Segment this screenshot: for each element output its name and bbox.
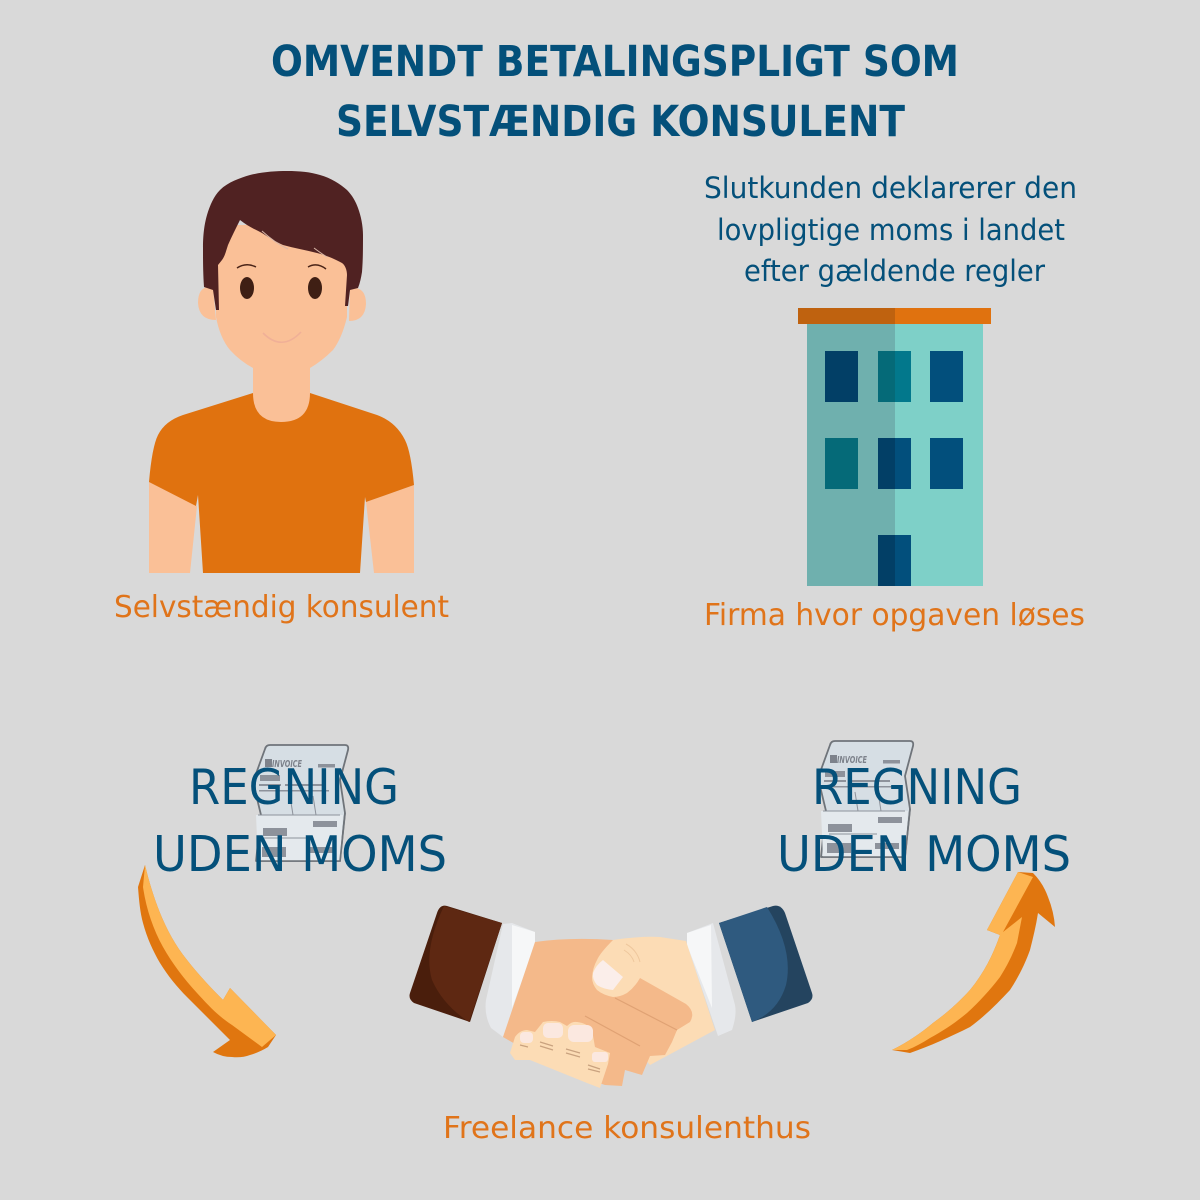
thumbnail <box>593 960 623 990</box>
windows <box>825 351 963 489</box>
text block: end customer note: efter gældende regler <box>744 254 1046 288</box>
right hand <box>610 937 715 1065</box>
arrow: down right <box>138 865 276 1057</box>
shirt <box>149 393 414 573</box>
icon: office building <box>798 308 991 586</box>
knuckle lines <box>520 1042 600 1072</box>
left hand <box>503 939 692 1086</box>
lower fingers <box>510 1021 610 1088</box>
text: invoice without VAT right <box>777 759 1071 883</box>
label: company: Firma hvor opgaven løses <box>704 598 1085 633</box>
arrow: up right <box>892 872 1055 1053</box>
left sleeve <box>410 906 502 1022</box>
icon: invoice left: INVOICE <box>272 759 302 770</box>
title: OMVENDT BETALINGSPLIGT SOM <box>271 38 959 87</box>
finger lines <box>585 998 677 1046</box>
eyebrows <box>237 265 326 269</box>
hair highlights <box>262 231 327 257</box>
arms <box>149 482 414 573</box>
text: invoice without VAT left <box>153 759 447 883</box>
thumb <box>592 940 642 997</box>
title <box>271 38 959 147</box>
label: consulting house: Freelance konsulenthus <box>443 1111 811 1146</box>
thumb creases <box>624 944 640 962</box>
ears <box>198 287 366 321</box>
icon: handshake <box>410 906 812 1088</box>
fingernails <box>520 1023 608 1062</box>
text block: end customer note: lovpligtige moms i landet <box>717 213 1065 247</box>
eyes <box>240 277 322 299</box>
left shirt cuff <box>486 923 535 1037</box>
title: SELVSTÆNDIG KONSULENT <box>336 98 905 147</box>
text: invoice without VAT left: REGNING <box>189 759 399 816</box>
neck <box>253 360 310 422</box>
roof <box>798 308 895 324</box>
right sleeve <box>719 906 812 1022</box>
building body <box>807 324 895 586</box>
hair <box>203 171 363 310</box>
icon: invoice right <box>818 741 913 857</box>
text block: end customer note <box>704 171 1077 288</box>
icon: consultant person <box>149 171 414 573</box>
text: invoice without VAT right: REGNING <box>812 759 1022 816</box>
right shirt cuff <box>687 923 736 1036</box>
door <box>878 535 911 586</box>
text: invoice without VAT right: UDEN MOMS <box>777 826 1071 883</box>
icon: invoice left <box>253 745 348 861</box>
text block: end customer note: Slutkunden deklarerer den <box>704 171 1077 205</box>
label: consultant: Selvstændig konsulent <box>114 590 449 625</box>
mouth <box>263 332 301 342</box>
icon: invoice right: INVOICE <box>837 755 867 766</box>
text: invoice without VAT left: UDEN MOMS <box>153 826 447 883</box>
face <box>216 225 347 373</box>
